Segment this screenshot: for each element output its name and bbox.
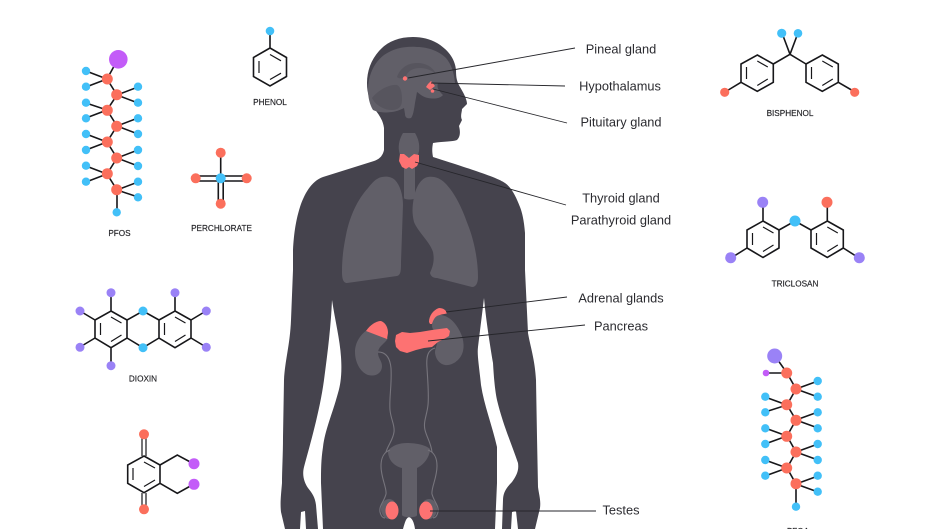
left kidney — [355, 321, 388, 376]
oxygen atoms — [191, 148, 252, 209]
molecule: PFOS — [82, 50, 142, 238]
molecule: perchlorate — [191, 148, 252, 233]
label: parathyroid gland: Parathyroid gland — [571, 212, 671, 228]
body silhouette — [281, 37, 540, 529]
right adrenal gland — [429, 308, 447, 324]
PFOS head atom — [109, 50, 128, 69]
human body with organs — [281, 37, 540, 529]
carbon atoms — [781, 368, 802, 489]
left ureter — [378, 352, 394, 452]
molecule: bisphenol — [720, 29, 859, 118]
right vas deferens — [428, 450, 438, 518]
lungs — [342, 177, 478, 287]
right kidney — [429, 308, 464, 365]
ring and bond — [254, 31, 286, 86]
hydroxyl atom — [822, 197, 832, 208]
left lung — [342, 177, 403, 283]
right ureter — [424, 348, 435, 452]
bonds — [196, 153, 246, 203]
gland labels — [571, 42, 671, 518]
chlorine atoms — [76, 288, 211, 370]
label: hypothalamus: Hypothalamus — [579, 78, 661, 94]
label: pituitary gland: Pituitary gland — [580, 114, 662, 130]
left testis — [386, 502, 398, 520]
pineal leader — [408, 48, 575, 78]
double bonds — [752, 227, 838, 252]
label: pancreas: Pancreas — [594, 318, 648, 334]
label: PFOS: PFOS — [108, 229, 131, 238]
double bonds — [100, 317, 186, 342]
corpus callosum — [397, 63, 436, 78]
right lung — [412, 177, 478, 287]
molecule: triclosan — [725, 197, 865, 288]
brain — [368, 47, 455, 118]
double bonds — [259, 54, 281, 80]
label: phenol: PHENOL — [253, 98, 287, 107]
right testis — [419, 502, 433, 520]
label: dioxin: DIOXIN — [129, 374, 157, 384]
small purple atom — [763, 370, 769, 376]
molecule: dioxin — [76, 288, 211, 384]
carbon atoms — [102, 74, 122, 195]
adrenal leader — [446, 297, 567, 312]
hypothalamus — [426, 81, 435, 90]
leader lines — [408, 48, 596, 511]
ureters — [378, 348, 435, 452]
molecule: quinone — [128, 429, 200, 514]
pituitary leader — [433, 89, 567, 123]
oxygen atoms — [139, 429, 149, 514]
bladder and penis — [388, 443, 430, 517]
left vas deferens — [380, 450, 390, 518]
label: bisphenol: BISPHENOL — [767, 109, 814, 118]
label: perchlorate: PERCHLORATE — [191, 224, 252, 233]
pineal gland — [403, 76, 407, 81]
double bonds — [746, 61, 833, 86]
label: pineal gland: Pineal gland — [586, 42, 656, 56]
bonds — [86, 59, 138, 212]
pancreas — [395, 328, 450, 353]
fluorine atoms — [761, 377, 822, 511]
rings and bonds — [80, 293, 206, 366]
kidney body — [355, 330, 388, 376]
double bonds — [133, 434, 155, 509]
head atoms — [767, 348, 782, 364]
chlorine atoms — [725, 197, 865, 263]
oxygen atom — [790, 216, 800, 226]
cerebellum — [372, 85, 402, 110]
pancreas leader — [428, 325, 585, 341]
ring and chains — [128, 455, 194, 493]
fluorine atoms — [82, 67, 142, 216]
larynx and trachea — [399, 133, 419, 200]
hypothalamus leader — [431, 83, 565, 86]
right scrotal shade — [421, 499, 437, 519]
thyroid leader — [415, 162, 566, 205]
molecule: phenol — [253, 27, 287, 107]
pituitary gland — [431, 89, 434, 93]
top atoms — [777, 29, 802, 38]
kidney body — [432, 315, 464, 365]
label: adrenal glands: Adrenal glands — [578, 290, 664, 306]
chlorine atom — [216, 173, 226, 183]
molecule: PFOA — [761, 348, 822, 529]
left adrenal gland — [366, 321, 388, 339]
rings and bonds — [725, 33, 855, 92]
testes leader — [430, 510, 596, 512]
thyroid gland — [399, 154, 419, 169]
label: testes: Testes — [602, 502, 640, 518]
left scrotal shade — [381, 499, 397, 519]
rings and bonds — [731, 203, 859, 258]
side atoms — [720, 88, 859, 97]
oxygen atom — [266, 27, 274, 35]
label: thyroid gland: Thyroid gland — [582, 190, 660, 206]
testes — [380, 450, 438, 520]
bonds — [765, 356, 818, 506]
label: triclosan: TRICLOSAN — [772, 280, 819, 288]
cerebrum — [368, 47, 455, 118]
oxygen atoms — [138, 306, 148, 352]
end atoms — [188, 458, 200, 490]
